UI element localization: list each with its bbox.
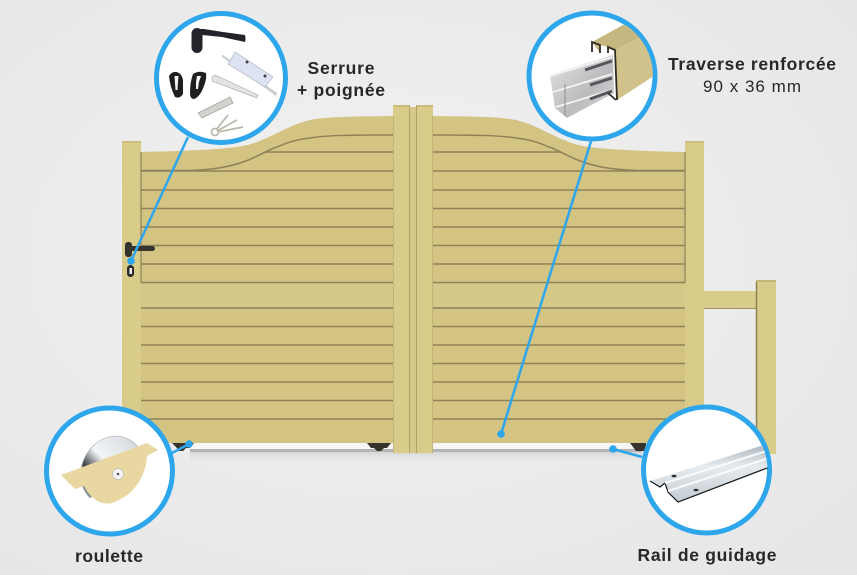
callout: guide rail: [644, 407, 775, 533]
right gate leaf: [416, 105, 704, 453]
label: lock and handle: [297, 58, 385, 100]
icon: strike plate: [212, 75, 258, 98]
label: lock and handle: + poignée: [297, 80, 385, 100]
icon: cylinder: [198, 97, 233, 118]
leader line: lock: [127, 137, 188, 265]
far right post: [756, 280, 776, 454]
leader line: crossbar: [497, 138, 592, 438]
label: rail: Rail de guidage: [638, 545, 777, 565]
leader line: wheel: [172, 440, 193, 453]
side connector bar: [704, 291, 757, 308]
gate rollers: [172, 443, 646, 451]
centre post: [393, 105, 410, 453]
callout: reinforced crossbar: [529, 13, 660, 139]
gate: [122, 105, 776, 454]
icon: keys: [212, 115, 243, 136]
icon: chrome wheel: [80, 436, 142, 498]
leader line: rail: [609, 445, 642, 457]
icon: steel rail: [650, 443, 775, 502]
icon: beige bracket: [61, 443, 158, 504]
icon: aluminium insert: [550, 55, 614, 118]
label: crossbar: 90 x 36 mm: [703, 77, 801, 96]
door handle on gate: [125, 242, 155, 277]
label: crossbar: [668, 54, 836, 96]
icon: beige profile: [592, 25, 660, 100]
icon: axle bolt: [112, 468, 124, 480]
icon: lock case: [221, 52, 277, 96]
label: lock and handle: Serrure: [308, 58, 375, 78]
icon: escutcheons: [169, 72, 206, 99]
guide rail on the ground: [190, 443, 642, 465]
gate post: [122, 141, 141, 443]
left gate leaf: [122, 105, 410, 453]
label: wheel: roulette: [75, 546, 143, 566]
callout: lock and handle: [156, 14, 286, 142]
label: crossbar: Traverse renforcée: [668, 54, 836, 74]
callout: wheel: [46, 408, 172, 534]
icon: handle: [192, 28, 246, 53]
